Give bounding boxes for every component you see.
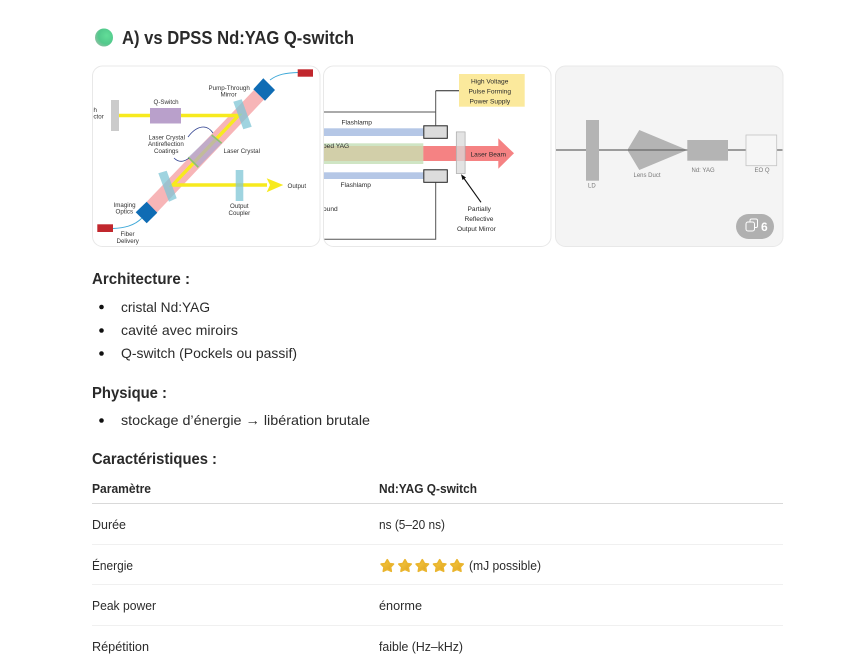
bullet list xyxy=(99,299,297,361)
row: énergie xyxy=(92,558,541,573)
row: durée: ns (5–20 ns) xyxy=(379,518,445,532)
mirror pointer arrow xyxy=(461,174,481,202)
diagram labels: Coatings xyxy=(154,148,178,155)
Nd:YAG rod xyxy=(323,143,423,164)
diagram labels: Coupler xyxy=(228,210,250,217)
bottom optic xyxy=(136,202,157,223)
top fiber xyxy=(270,72,298,80)
coating arrows xyxy=(174,127,213,161)
diagram labels: Flashlamp xyxy=(340,182,371,189)
row: durée xyxy=(92,518,445,532)
header row: Nd:YAG Q-switch xyxy=(379,482,477,496)
diagram labels: Laser Beam xyxy=(470,152,507,158)
bottom electrode xyxy=(424,170,447,182)
row: peak power: énorme xyxy=(379,599,422,613)
icon: gallery xyxy=(746,219,758,231)
bottom pump diode xyxy=(97,224,113,232)
laser path xyxy=(119,116,267,185)
badge count: 6 xyxy=(761,220,768,234)
output arrowhead xyxy=(267,178,283,192)
diagram labels: Antireflection xyxy=(148,141,184,148)
panel: DPSS schematic xyxy=(556,66,783,246)
bullet list: stockage d’énergie → libération brutale xyxy=(121,412,370,428)
diagram labels: Q-Switch xyxy=(154,99,179,106)
row: énergie: Énergie xyxy=(92,558,133,573)
power supply box: Pulse Forming xyxy=(468,88,511,96)
LD block xyxy=(586,120,599,181)
diagram labels: Partially xyxy=(468,206,492,213)
pump-through mirror xyxy=(233,99,252,129)
EO Q block xyxy=(746,135,777,166)
top electrode xyxy=(424,126,447,138)
power connection xyxy=(436,90,459,92)
diagram labels xyxy=(90,85,306,245)
panel: flashlamp-pumped laser diagram xyxy=(323,66,551,246)
output mirror xyxy=(456,132,465,174)
diagram labels xyxy=(588,168,770,190)
Nd:YAG block xyxy=(687,140,728,161)
icon: high reflector xyxy=(111,100,119,131)
power supply box: Power Supply xyxy=(470,98,511,106)
diagram labels: Mirror xyxy=(220,92,237,98)
diagram labels: ector xyxy=(90,114,104,120)
title xyxy=(95,28,354,48)
top optic xyxy=(253,78,275,101)
diagram labels: Flashlamp xyxy=(342,120,372,126)
top flashlamp xyxy=(323,128,423,136)
bullet list: cristal Nd:YAG xyxy=(121,299,210,315)
five star rating xyxy=(381,560,463,571)
diagram labels: Output Mirror xyxy=(457,226,497,233)
diagram labels: gh xyxy=(90,107,97,114)
diagram labels: ound xyxy=(323,206,338,213)
diagram labels: EO Q xyxy=(754,168,770,174)
heading: Physique : xyxy=(92,385,167,402)
lens duct xyxy=(627,130,687,170)
section: architecture xyxy=(92,271,297,361)
diagram labels: Laser Crystal xyxy=(148,134,185,142)
table xyxy=(92,482,783,654)
imaging mirror xyxy=(158,171,177,202)
diagram labels: Pump-Through xyxy=(208,85,250,92)
row: répétition xyxy=(92,640,463,654)
image count badge xyxy=(736,214,774,239)
heading text: A) vs DPSS Nd:YAG Q-switch xyxy=(122,28,354,48)
diagram labels: Output xyxy=(288,183,306,190)
q-switch xyxy=(150,108,181,124)
diagram labels: LD xyxy=(588,184,596,190)
icon: green sphere xyxy=(95,28,113,46)
row: énergie: (mJ possible) xyxy=(469,559,541,573)
diagram labels: Fiber xyxy=(120,231,135,238)
row: peak power xyxy=(92,599,422,613)
row: peak power: Peak power xyxy=(92,599,156,613)
diagram labels: Nd: YAG xyxy=(692,168,715,174)
row: répétition: Répétition xyxy=(92,640,149,654)
diagram labels: Imaging xyxy=(114,202,136,209)
top pump diode xyxy=(298,69,313,77)
axis through lens duct xyxy=(628,150,687,151)
cavity housing xyxy=(323,91,436,239)
optical axis xyxy=(556,150,782,151)
row: répétition: faible (Hz–kHz) xyxy=(379,640,463,654)
diagram labels: Reflective xyxy=(464,216,494,223)
diagram labels xyxy=(323,120,507,233)
diagram labels: Output xyxy=(230,203,249,210)
section: physique xyxy=(92,385,370,428)
panel: fiber-pumped laser diagram xyxy=(90,66,320,246)
crystal coatings xyxy=(188,135,222,167)
output coupler xyxy=(236,170,243,201)
bottom fiber xyxy=(113,218,142,228)
row: durée: Durée xyxy=(92,518,126,532)
heading: Architecture : xyxy=(92,271,190,288)
diagram labels: Laser Crystal xyxy=(224,148,260,155)
bullet list: Q-switch (Pockels ou passif) xyxy=(121,345,297,361)
bullet list: cavité avec miroirs xyxy=(121,322,238,338)
diagram labels: Delivery xyxy=(116,238,140,245)
diagram labels: ped YAG xyxy=(323,143,349,150)
header row xyxy=(92,482,477,496)
laser crystal xyxy=(188,135,222,167)
power supply box: High Voltage xyxy=(471,78,509,86)
header row: Paramètre xyxy=(92,482,151,496)
laser beam arrow xyxy=(423,138,514,169)
bottom flashlamp xyxy=(323,172,423,179)
section heading: caractéristiques: Caractéristiques : xyxy=(92,451,217,468)
power supply box xyxy=(459,74,525,107)
pump beam xyxy=(147,90,264,213)
diagram labels: Optics xyxy=(116,208,133,216)
diagram labels: Lens Duct xyxy=(634,173,661,179)
